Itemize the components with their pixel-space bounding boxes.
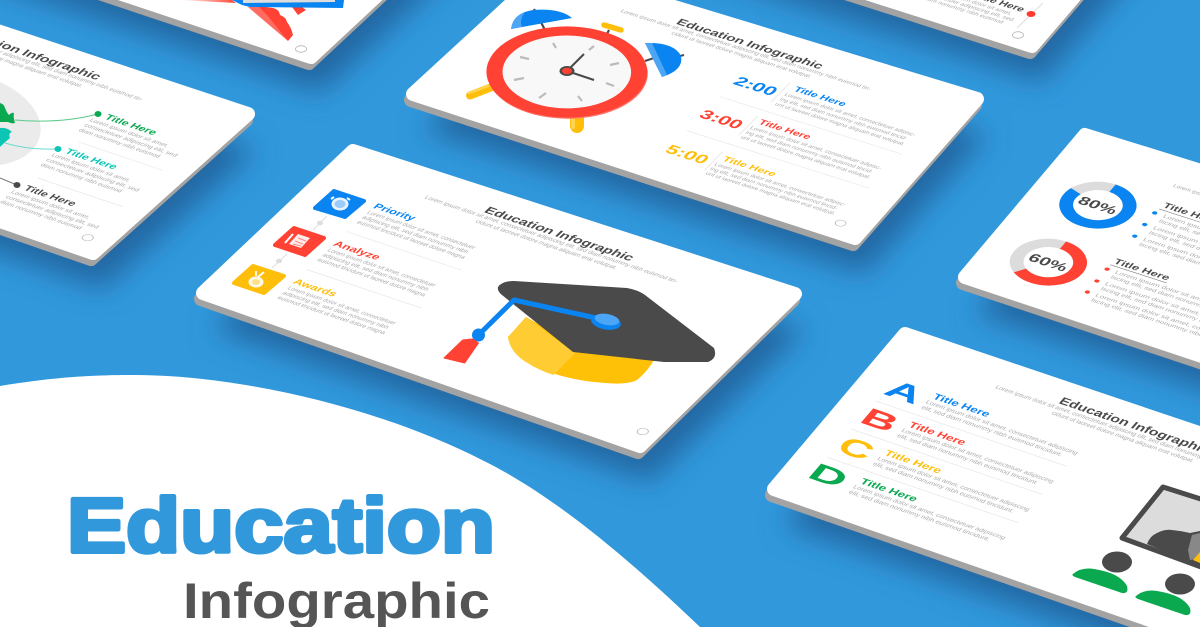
- icon: classroom screen: [1122, 487, 1200, 568]
- text: slide content: Analyze: [330, 240, 383, 262]
- text: slide content: unt ut laoreet dolore magna aliquam erat volutpat.: [704, 171, 837, 216]
- panel: alarm clock slide: [411, 0, 977, 244]
- connector: analyze to awards: [272, 254, 287, 268]
- text: slide content: Title Here: [756, 119, 813, 141]
- chart: globe with leader lines: [0, 58, 102, 188]
- bullet connector and dot: [1017, 3, 1043, 28]
- text: slide content: 3:00: [695, 107, 747, 132]
- chart: 60% donut: 60%: [1025, 252, 1071, 274]
- chart: 60% donut: [1006, 236, 1091, 288]
- text: slide content: [512, 1, 962, 227]
- text: slide content: Title Here: [21, 184, 79, 208]
- text: slide content: diam nonummy nibh euismod: [0, 200, 83, 231]
- text: slide content: consectetuer adipiscing elit, sed: [4, 195, 100, 230]
- text: slide content: elit, sed diam nonummy nibh euismod tincidunt.: [895, 433, 1040, 486]
- panel: main graduation cap slide: [201, 151, 795, 452]
- text: slide content: Title Here: [62, 147, 120, 171]
- text: slide content: Title Here: [102, 113, 159, 137]
- text: slide content: Title Here: [906, 420, 968, 447]
- chart: 80% donut: [1055, 179, 1141, 231]
- panel: globe slide: [0, 0, 248, 259]
- text: slide content: Lorem ipsum dolor sit amet, consectetuer adipiscing: [900, 428, 1055, 485]
- text: slide content: consectetuer adipiscing elit, sed: [44, 158, 141, 193]
- text: slide content: ing elit, sed diam nonummy nibh euismod tincid-: [708, 167, 839, 211]
- text: slide content: Lorem ipsum dolor sit amet, consectetuer adipiscing: [851, 484, 1007, 541]
- icon: priority square: [315, 191, 364, 217]
- text: slide content: cidunt ut laoreet dolore magna aliquam erat volutpat.: [670, 31, 813, 79]
- text block: lower list: Title Here: [1111, 258, 1172, 283]
- text: slide content: adipiscing elit, sed diam nonummy nibh: [321, 253, 430, 292]
- connector: priority to analyze: [313, 216, 327, 230]
- text: slide content: Title Here: [930, 392, 992, 419]
- text: slide content: Lorem ipsum dolor sit amet, consectetuer adipiscing: [876, 456, 1031, 513]
- text: slide content: Lorem ipsum dolor sit amet,: [88, 118, 170, 149]
- icon: student right: [1135, 574, 1195, 615]
- icon: analyze square: [275, 228, 324, 255]
- text: slide content: Title Here: [882, 449, 944, 476]
- text: slide content: euismod tincidunt ut laoreet dolore magna: [315, 258, 427, 298]
- icon: alarm clock: [457, 9, 684, 135]
- icon: book illustration: [180, 0, 344, 41]
- white curved title area: [0, 375, 700, 627]
- text: slide content: Priority: [371, 202, 419, 223]
- text: slide content: euismod tincidunt ut laoreet dolore magna: [355, 220, 467, 260]
- text: slide content: C: [831, 432, 881, 466]
- text: slide content: Lorem ipsum dolor sit amet, consectetuer adipisc-: [748, 126, 883, 171]
- text: slide content: Title Here: [791, 86, 848, 108]
- text: slide content: adipiscing elit, sed diam nonummy nibh: [281, 291, 390, 330]
- panel: top-right slide: [595, 0, 1151, 52]
- text: slide content: Awards: [290, 277, 339, 299]
- text: slide content: Lorem ipsum dolor sit amet, consectetuer adipisc-: [783, 92, 917, 138]
- text: slide content: Lorem ipsum dolor sit amet, consectetuer: [326, 248, 438, 288]
- text: slide content: elit, sed diam nonummy nibh euismod tincidunt.: [920, 405, 1064, 458]
- text: slide content: [802, 345, 1200, 599]
- icon: student left: [1072, 552, 1132, 593]
- text: slide content: D: [802, 458, 855, 493]
- text: slide content: [265, 176, 784, 436]
- text block: lower list: [1079, 257, 1200, 348]
- text: slide content: 5:00: [661, 142, 713, 167]
- text: slide content: B: [854, 403, 906, 437]
- heading: Education: Education: [67, 483, 495, 569]
- text: slide content: Lorem ipsum dolor sit amet,: [9, 190, 92, 220]
- text: slide content: ing elit, sed diam nonummy nibh euismod tincid-: [778, 97, 909, 141]
- text: slide content: Lorem ipsum dolor sit amet, consectetuer: [286, 286, 398, 326]
- text: slide content: Education Infographic: [481, 205, 638, 263]
- text: slide content: consectetuer adipiscing elit, sed: [82, 123, 179, 158]
- text: slide content: Title Here: [720, 155, 778, 179]
- text: slide content: Title Here: [858, 477, 920, 504]
- text: slide content: euismod tincidunt ut laoreet dolore magna: [276, 295, 387, 336]
- panel: percentage donut slide: [963, 135, 1200, 428]
- panel: A B C D classroom slide: [772, 334, 1200, 627]
- text: slide content: Lorem ipsum dolor sit amet,: [50, 153, 132, 183]
- text: slide content: adipiscing elit, sed diam nonummy nibh: [360, 215, 470, 255]
- chart: 80% donut: 80%: [1074, 195, 1120, 217]
- page number: [1012, 32, 1024, 38]
- text: slide content: [0, 5, 229, 242]
- icon: graduation cap: [444, 281, 715, 384]
- text: slide content: Lorem ipsum dolor sit amet, consectetuer adipiscing elit, sed diam nonummy nibh euismod tin-: [619, 9, 873, 92]
- text block: upper list: [1125, 183, 1200, 323]
- page number: [296, 46, 306, 52]
- text: slide content: A: [878, 375, 931, 409]
- text: slide content: Lorem ipsum dolor sit amet, consectetuer adipisc-: [713, 162, 847, 208]
- panel: top-left book slide: [0, 0, 460, 63]
- text: slide content: Lorem ipsum dolor sit amet, consectetuer adipiscing elit, sed diam nonummy nibh euismod tin-: [423, 195, 679, 284]
- text: slide content: Lorem ipsum dolor sit amet, consectetuer: [365, 210, 477, 251]
- text: slide content: Lorem ipsum dolor sit amet, consectetuer adipiscing: [924, 400, 1079, 456]
- text: slide content: 2:00: [730, 74, 782, 99]
- icon: awards square: [234, 266, 284, 293]
- text: slide content: elit, sed diam nonummy nibh euismod tincidunt.: [871, 461, 1016, 514]
- text: slide content: unt ut laoreet dolore magna aliquam erat volutpat.: [739, 135, 872, 180]
- text: slide content: diam nonummy nibh euismod: [77, 128, 162, 159]
- text: slide content: elit, sed diam nonummy nibh euismod tincidunt.: [847, 490, 991, 542]
- text: slide content: diam nonummy nibh euismod: [39, 163, 124, 194]
- text: slide content: unt ut laoreet dolore magna aliquam erat volutpat.: [773, 102, 907, 147]
- text: slide content: Education Infographic: [674, 17, 826, 71]
- text: slide content: ing elit, sed diam nonummy nibh euismod tincid-: [744, 130, 874, 175]
- text: slide content: cidunt ut laoreet dolore magna aliquam erat volutpat.: [474, 219, 619, 271]
